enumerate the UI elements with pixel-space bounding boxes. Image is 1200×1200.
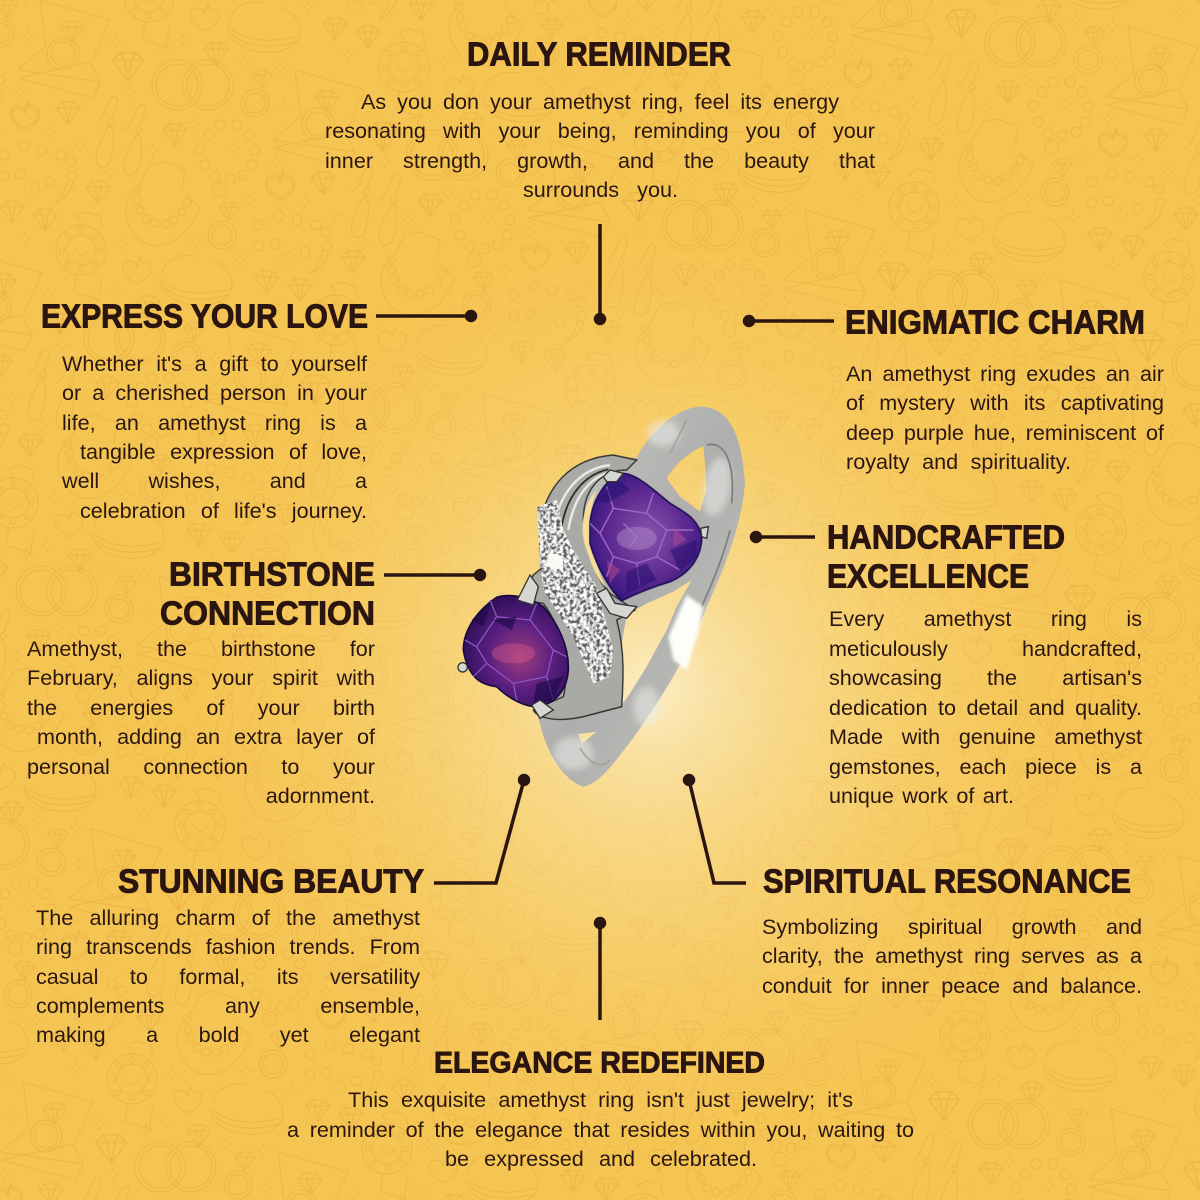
text: enigmatic charm body: of mystery with its captivating [846, 390, 1164, 415]
text: handcrafted excellence body: showcasing the artisan's [829, 665, 1142, 690]
text: express your love body: well wishes, and a [62, 468, 367, 493]
icon: pave diamonds [537, 500, 613, 683]
text: enigmatic charm body [846, 361, 1164, 474]
text: express your love body: tangible expression of love, [80, 439, 367, 464]
text: express your love body [62, 351, 368, 523]
text: daily reminder body [325, 89, 875, 202]
text: express your love body: or a cherished person in your [62, 380, 367, 405]
text: daily reminder body: surrounds you. [523, 177, 678, 202]
heading: birthstone connection: BIRTHSTONE [169, 556, 375, 592]
text: handcrafted excellence body: gemstones, each piece is a [829, 754, 1142, 779]
text: daily reminder body: As you don your amethyst ring, feel its energy [361, 89, 839, 114]
text: elegance redefined body: a reminder of the elegance that resides within you, waiting to [287, 1117, 914, 1142]
icon: crescent opening [583, 490, 605, 587]
text: elegance redefined body: This exquisite amethyst ring isn't just jewelry; it's [348, 1087, 853, 1112]
text: enigmatic charm body: An amethyst ring exudes an air [846, 361, 1164, 386]
text: handcrafted excellence body: Made with genuine amethyst [829, 724, 1142, 749]
text: birthstone connection body: adornment. [266, 783, 375, 808]
text: stunning beauty body: making a bold yet elegant [36, 1022, 420, 1047]
text: express your love body: life, an amethyst ring is a [62, 410, 367, 435]
heading: express your love: EXPRESS YOUR LOVE [41, 298, 368, 334]
text: stunning beauty body: ring transcends fashion trends. From [36, 934, 420, 959]
text: spiritual resonance body: conduit for inner peace and balance. [762, 973, 1142, 998]
panel: spiritual resonance [762, 862, 1142, 998]
text: birthstone connection body [27, 636, 376, 808]
text: daily reminder body: inner strength, growth, and the beauty that [325, 148, 875, 173]
icon: lower heart amethyst [463, 596, 568, 707]
panel: daily reminder [325, 36, 875, 202]
text: birthstone connection body: Amethyst, the birthstone for [27, 636, 375, 661]
panel: express your love [41, 298, 368, 523]
icon: upper heart amethyst [590, 473, 702, 601]
text: birthstone connection body: February, aligns your spirit with [27, 665, 375, 690]
text: handcrafted excellence body: meticulously handcrafted, [829, 636, 1142, 661]
text: birthstone connection body: the energies of your birth [27, 695, 375, 720]
text: spiritual resonance body: Symbolizing spiritual growth and [762, 914, 1142, 939]
text: birthstone connection body: month, adding an extra layer of [37, 724, 375, 749]
heading: handcrafted excellence [827, 518, 1065, 594]
text: enigmatic charm body: deep purple hue, reminiscent of [846, 420, 1164, 445]
heading: enigmatic charm: ENIGMATIC CHARM [845, 304, 1145, 340]
heading: spiritual resonance: SPIRITUAL RESONANCE [763, 862, 1131, 900]
text: express your love body: celebration of life's journey. [80, 498, 367, 523]
icon: silver band [537, 407, 745, 787]
text: handcrafted excellence body: dedication to detail and quality. [829, 695, 1142, 720]
text: spiritual resonance body [762, 914, 1142, 998]
heading: stunning beauty: STUNNING BEAUTY [118, 862, 424, 900]
icon: swirl setting [520, 455, 637, 719]
text: stunning beauty body: The alluring charm of the amethyst [36, 905, 420, 930]
text: enigmatic charm body: royalty and spirituality. [846, 449, 1071, 474]
heading: birthstone connection: CONNECTION [160, 594, 375, 632]
text: stunning beauty body: casual to formal, its versatility [36, 964, 420, 989]
heading: elegance redefined: ELEGANCE REDEFINED [434, 1046, 765, 1080]
heading: handcrafted excellence: EXCELLENCE [827, 558, 1029, 594]
heading: handcrafted excellence: HANDCRAFTED [827, 518, 1065, 556]
panel: handcrafted excellence [827, 518, 1142, 808]
panel: stunning beauty [36, 862, 424, 1047]
icon: prongs [458, 470, 708, 718]
panel: birthstone connection [27, 556, 376, 808]
text: daily reminder body: resonating with your being, reminding you of your [325, 118, 875, 143]
text: elegance redefined body: be expressed and celebrated. [445, 1146, 757, 1171]
panel: enigmatic charm [845, 304, 1164, 474]
heading: daily reminder: DAILY REMINDER [467, 36, 731, 72]
text: spiritual resonance body: clarity, the amethyst ring serves as a [762, 943, 1142, 968]
text: stunning beauty body: complements any ensemble, [36, 993, 420, 1018]
text: handcrafted excellence body: Every amethyst ring is [829, 606, 1142, 631]
heading: birthstone connection [160, 556, 375, 632]
text: handcrafted excellence body: unique work of art. [829, 783, 1014, 808]
text: stunning beauty body [36, 905, 420, 1047]
icon: band highlight [668, 595, 703, 670]
text: birthstone connection body: personal connection to your [27, 754, 375, 779]
text: express your love body: Whether it's a gift to yourself [62, 351, 367, 376]
text: elegance redefined body [287, 1087, 914, 1171]
panel: elegance redefined [287, 1046, 914, 1171]
text: handcrafted excellence body [829, 606, 1142, 808]
